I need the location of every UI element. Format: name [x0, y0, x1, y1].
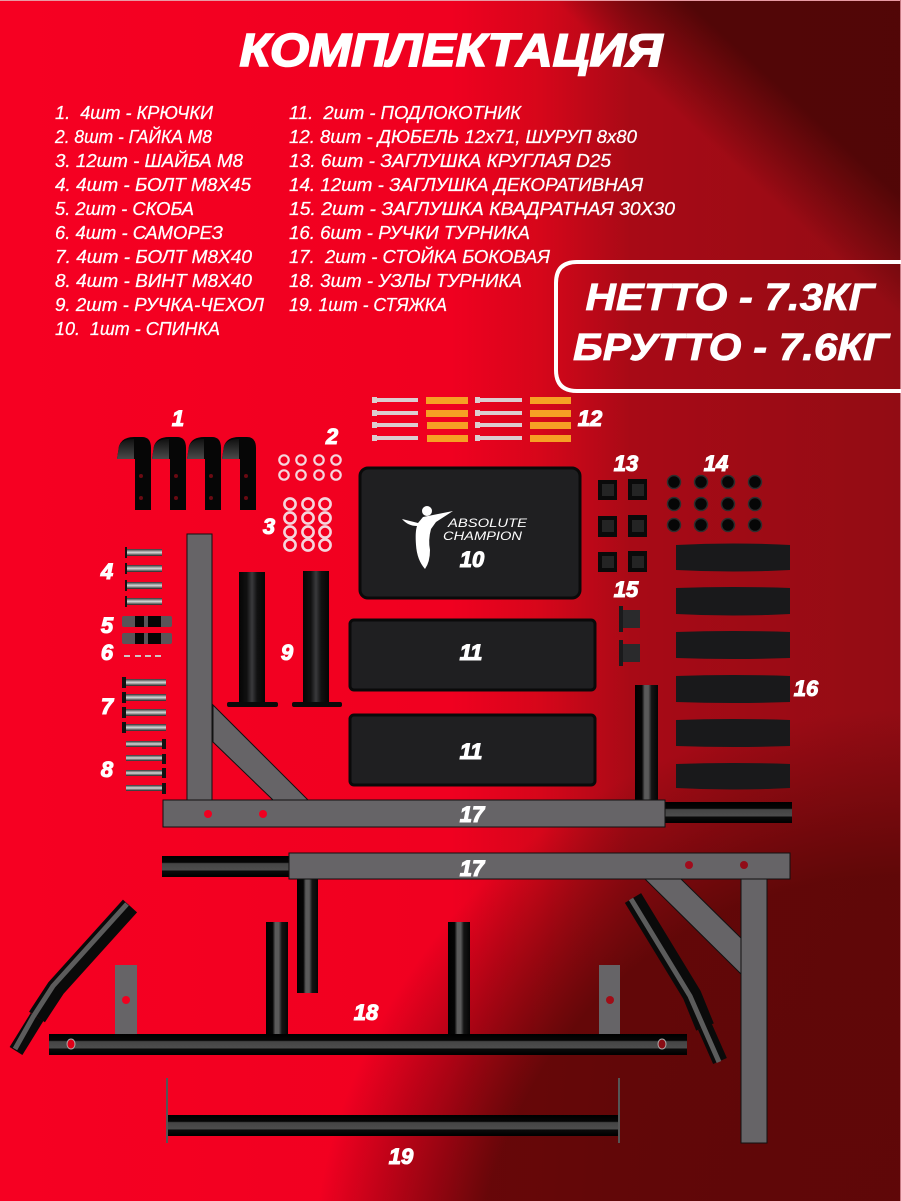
- item number labels: 10: [460, 547, 485, 572]
- item number labels: 11: [460, 739, 482, 764]
- item number labels: 15: [614, 577, 639, 602]
- item number labels: 19: [389, 1144, 414, 1169]
- item 15: square plugs: [619, 606, 640, 666]
- item number labels: 17: [460, 856, 486, 881]
- weight callout: [556, 262, 901, 391]
- item 17: side post, upper: [163, 534, 792, 827]
- parts list, right column: 19. 1шт - СТЯЖКА: [289, 295, 447, 315]
- item 5: second bracket: [122, 633, 172, 644]
- item 11: second armrest pad: [350, 715, 595, 785]
- item 12: anchors and screws: [372, 397, 571, 442]
- item number labels: 11: [460, 640, 482, 665]
- item 2: nuts: [279, 455, 341, 480]
- item number labels: 5: [101, 613, 114, 638]
- item 14: decorative caps: [668, 476, 762, 532]
- item number labels: 12: [578, 406, 603, 431]
- parts list, right column: 17. 2шт - СТОЙКА БОКОВАЯ: [289, 246, 551, 267]
- item number labels: 1: [172, 406, 184, 431]
- parts list, left column: 6. 4шт - САМОРЕЗ: [55, 223, 223, 243]
- parts list, left column: 1. 4шт - КРЮЧКИ: [55, 103, 213, 123]
- parts list, left column: [54, 103, 265, 339]
- parts list, right column: 13. 6шт - ЗАГЛУШКА КРУГЛАЯ D25: [289, 151, 612, 171]
- item 7: bolts: [122, 677, 166, 733]
- weight callout: НЕТТО - 7.3КГ: [586, 277, 876, 319]
- item number labels: 9: [281, 640, 294, 665]
- parts list, right column: 15. 2шт - ЗАГЛУШКА КВАДРАТНАЯ 30Х30: [289, 199, 675, 219]
- item number labels: 13: [614, 451, 638, 476]
- title: КОМПЛЕКТАЦИЯ: [240, 24, 664, 76]
- parts list, right column: 14. 12шт - ЗАГЛУШКА ДЕКОРАТИВНАЯ: [289, 175, 644, 195]
- item 10: back pad with logo: [360, 468, 580, 598]
- logo figure: [402, 506, 453, 569]
- item 1: hooks: [117, 437, 256, 510]
- item number labels: 17: [460, 802, 486, 827]
- parts list, left column: 4. 4шт - БОЛТ М8Х45: [55, 175, 252, 195]
- item 18: pull-up bar units: [15, 898, 720, 1062]
- weight callout: БРУТТО - 7.6КГ: [573, 327, 891, 369]
- item number labels: 14: [704, 451, 728, 476]
- item number labels: 6: [101, 640, 114, 665]
- item 19: tie bar: [166, 1078, 620, 1143]
- item 9: handle sleeves: [227, 571, 342, 707]
- item number labels: 2: [325, 424, 339, 449]
- item 3: washers: [284, 498, 331, 551]
- parts list, left column: 7. 4шт - БОЛТ М8Х40: [55, 247, 252, 267]
- item number labels: 18: [354, 1000, 379, 1025]
- item 5: bracket: [122, 616, 172, 627]
- parts list, left column: 5. 2шт - СКОБА: [55, 199, 194, 219]
- item number labels: 4: [100, 559, 113, 584]
- logo wordmark: [443, 516, 528, 543]
- parts list, left column: 2. 8шт - ГАЙКА М8: [54, 126, 212, 147]
- item 8: screws: [126, 739, 166, 794]
- parts list, left column: 3. 12шт - ШАЙБА М8: [55, 150, 243, 171]
- item number labels: 7: [101, 694, 115, 719]
- item number labels: [100, 406, 819, 1169]
- item number labels: 3: [263, 514, 275, 539]
- parts list, right column: 18. 3шт - УЗЛЫ ТУРНИКА: [289, 271, 522, 291]
- parts list, right column: 12. 8шт - ДЮБЕЛЬ 12x71, ШУРУП 8x80: [289, 127, 637, 147]
- parts list, right column: [289, 103, 675, 315]
- logo wordmark: CHAMPION: [443, 529, 522, 543]
- item 6: self-tapping screws: [124, 655, 161, 657]
- item number labels: 16: [794, 676, 819, 701]
- parts list, left column: 9. 2шт - РУЧКА-ЧЕХОЛ: [55, 295, 265, 315]
- item 16: handle grips: [676, 544, 790, 790]
- item 11: armrest pad: [350, 620, 595, 690]
- logo wordmark: ABSOLUTE: [447, 516, 528, 530]
- item 4: bolts: [125, 547, 162, 607]
- item 13: round plugs: [598, 479, 647, 572]
- parts list, right column: 16. 6шт - РУЧКИ ТУРНИКА: [289, 223, 530, 243]
- parts list, left column: 10. 1шт - СПИНКА: [55, 319, 220, 339]
- parts list, left column: 8. 4шт - ВИНТ М8Х40: [55, 271, 252, 291]
- item number labels: 8: [101, 757, 114, 782]
- item 17: side post, lower: [162, 853, 790, 1143]
- parts list, right column: 11. 2шт - ПОДЛОКОТНИК: [289, 103, 522, 123]
